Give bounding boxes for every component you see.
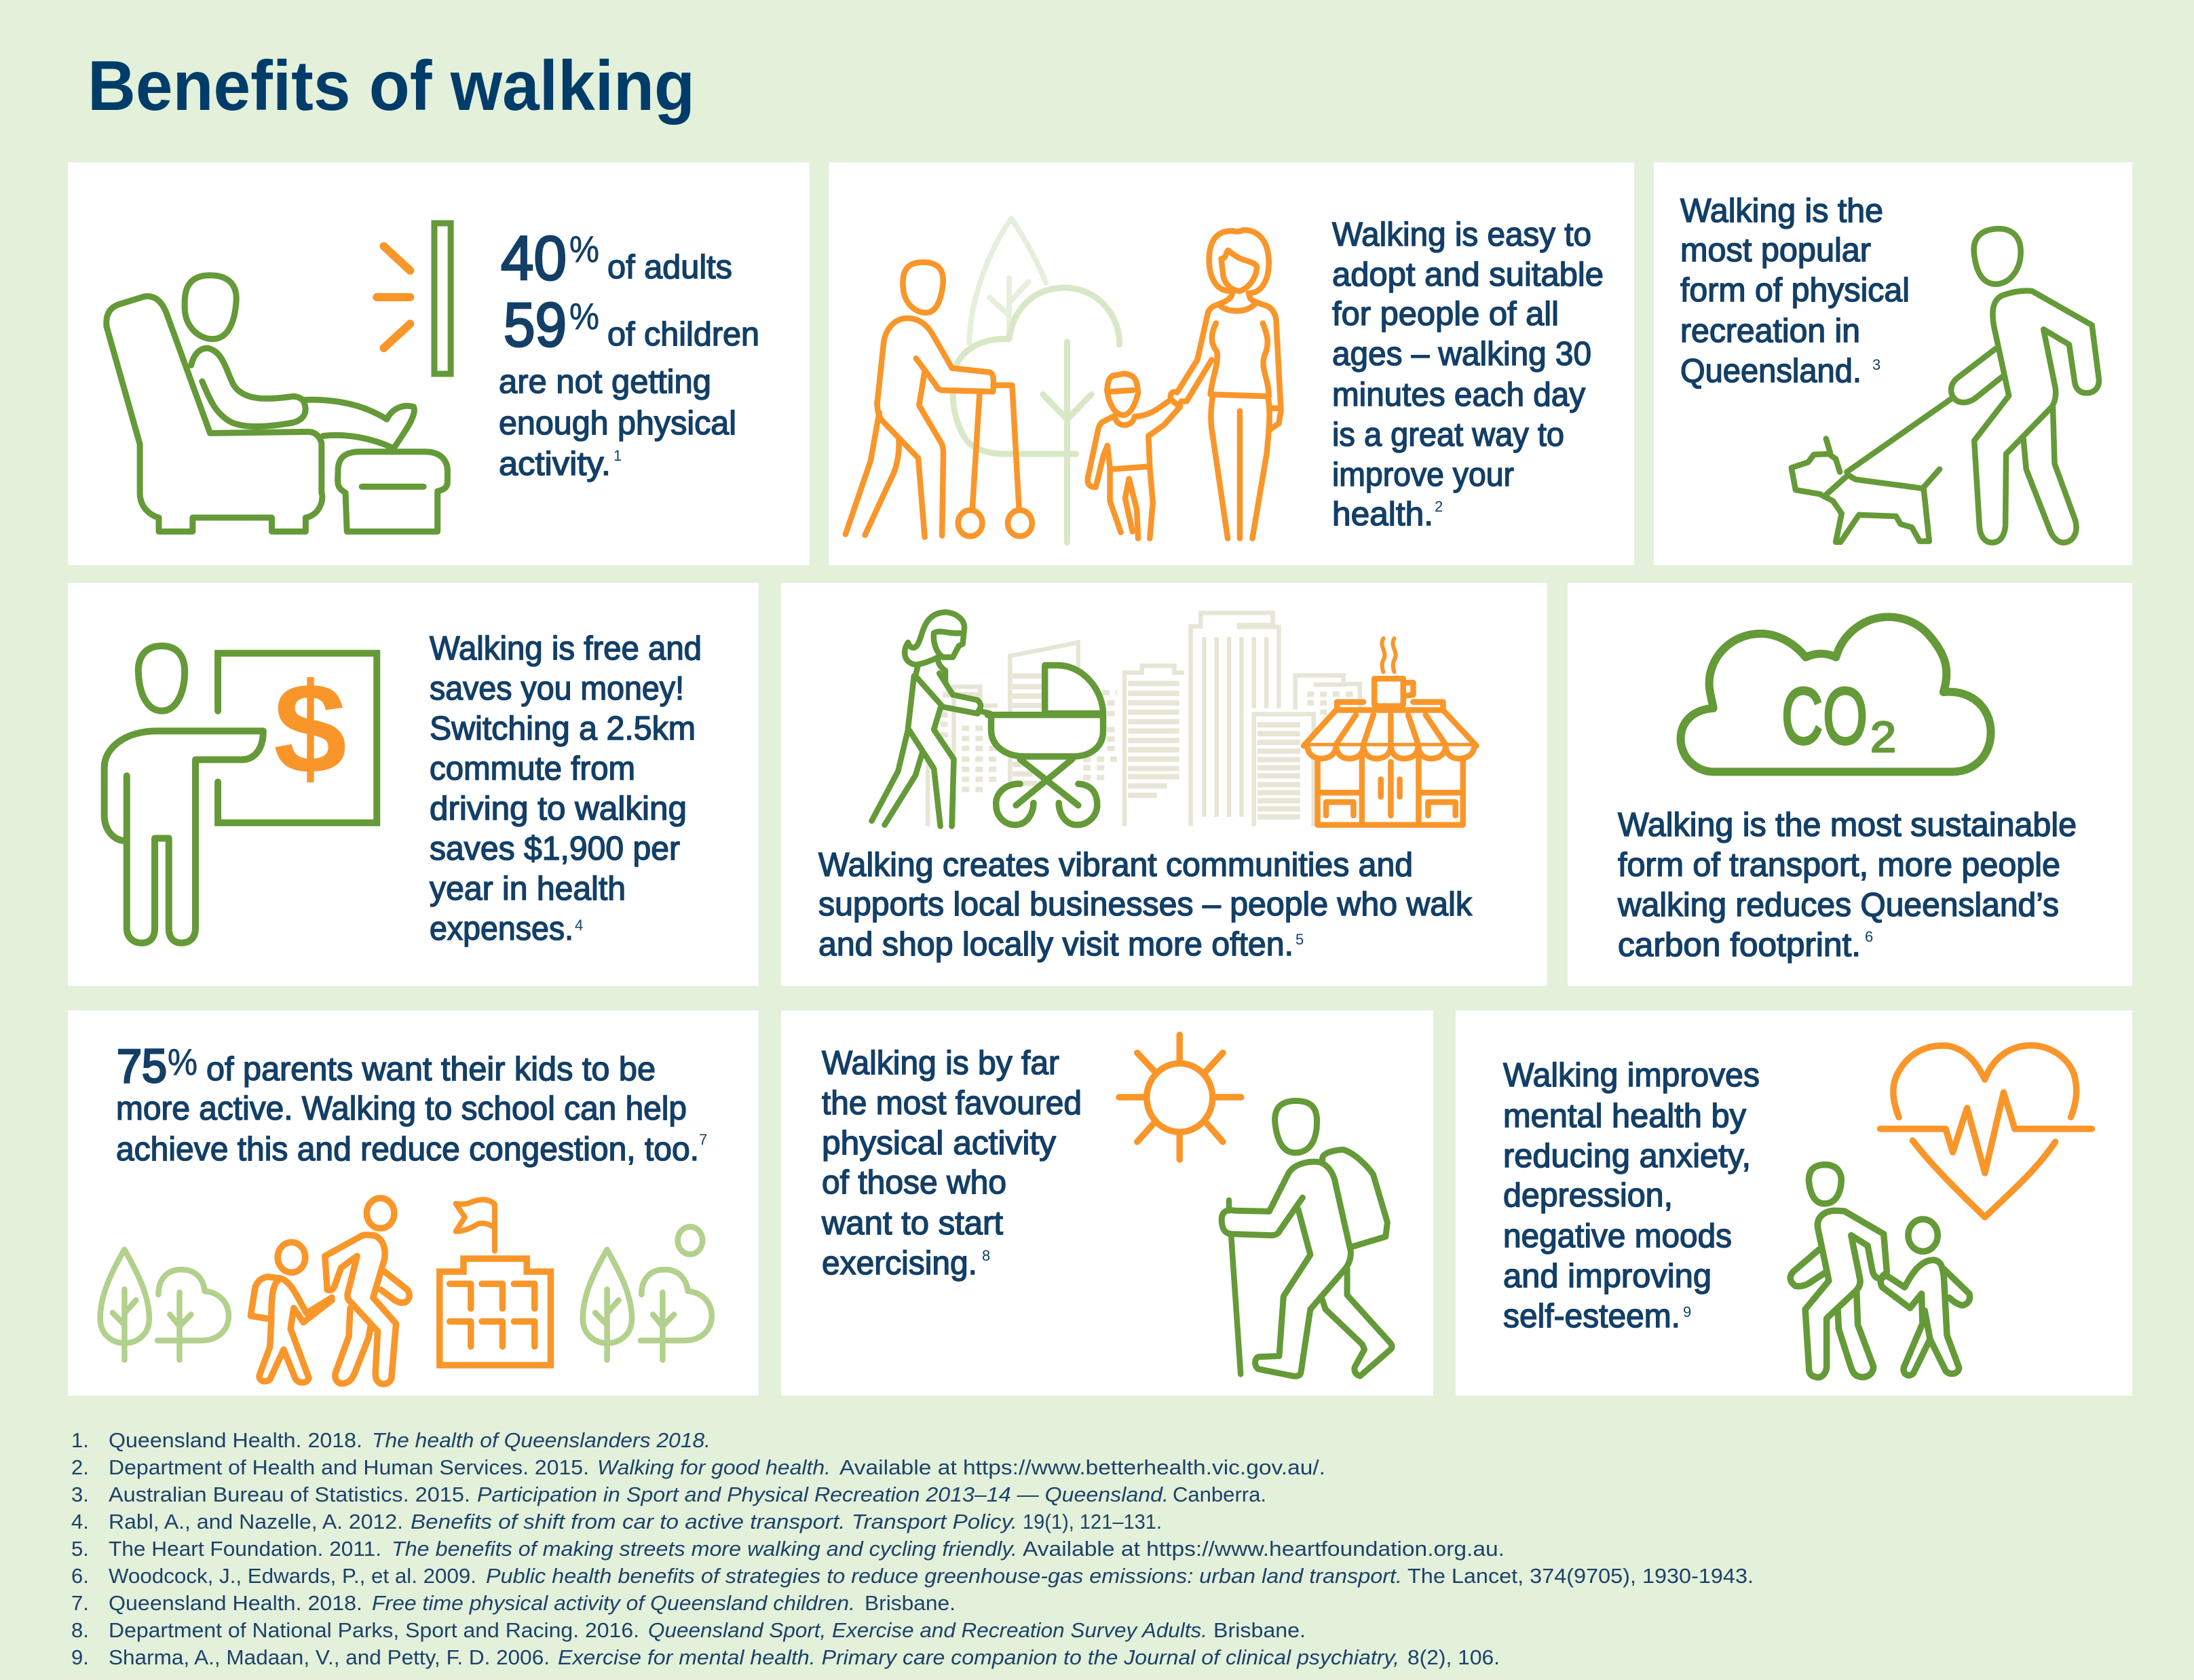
references list — [71, 1428, 1754, 1669]
text: easy to adopt: Walking is easy to — [1332, 216, 1591, 253]
text: saves money: 4 — [575, 917, 583, 934]
references list: 8(2), 106. — [1407, 1645, 1500, 1669]
statistic text: 1 — [613, 447, 622, 464]
text: mental health: self-esteem. — [1503, 1298, 1680, 1335]
references list: Available at https://www.heartfoundation.org.au. — [1023, 1537, 1505, 1561]
references list: The Heart Foundation. 2011. — [109, 1537, 381, 1561]
references list: 5. — [71, 1537, 89, 1561]
panel: vibrant communities — [781, 583, 1547, 986]
text: saves money: commute from — [430, 750, 635, 787]
references list: The benefits of making streets more walking and cycling friendly. — [392, 1537, 1017, 1561]
references list: Free time physical activity of Queensland children. — [372, 1591, 855, 1615]
statistic text: of children — [607, 316, 759, 353]
statistic text: 40 — [501, 224, 567, 293]
text: sustainable transport — [1617, 807, 2077, 963]
references list: Sharma, A., Madaan, V., and Petty, F. D. 2006. — [109, 1645, 550, 1669]
references list: Brisbane. — [1213, 1618, 1306, 1642]
references list: 7. — [71, 1591, 89, 1615]
statistic text: of adults — [607, 249, 732, 286]
text: walking to school: % — [168, 1041, 197, 1083]
references list: Exercise for mental health. Primary care companion to the Journal of clinical psychiatry, — [558, 1645, 1399, 1669]
text: walking to school — [116, 1039, 707, 1168]
icon: older man with walker, child and mother among trees — [846, 218, 1281, 543]
references list: Australian Bureau of Statistics. 2015. — [109, 1483, 470, 1506]
text: walking to school: achieve this and reduce congestion, too. — [116, 1131, 699, 1168]
text: mental health: reducing anxiety, — [1503, 1138, 1751, 1175]
statistic text: % — [569, 295, 599, 337]
icon: person pointing at a dollar board — [105, 646, 377, 943]
text: favoured activity — [821, 1045, 1082, 1282]
references list: Canberra. — [1173, 1483, 1266, 1506]
references list: Participation in Sport and Physical Recreation 2013–14 — Queensland. — [477, 1483, 1169, 1506]
references list: Walking for good health. — [597, 1455, 831, 1479]
panel: easy to adopt — [829, 162, 1634, 565]
statistic text — [499, 224, 759, 482]
text: saves money: Switching a 2.5km — [430, 710, 696, 747]
text: sustainable transport: form of transport, more people — [1618, 847, 2060, 883]
text: easy to adopt: improve your — [1332, 457, 1514, 493]
text: most popular recreation — [1680, 193, 1910, 389]
text: mental health: Walking improves — [1503, 1057, 1760, 1094]
text: walking to school: of parents want their kids to be — [206, 1051, 656, 1088]
text: sustainable transport: Walking is the most sustainable — [1618, 807, 2077, 843]
text: walking to school: more active. Walking to school can help — [116, 1090, 687, 1127]
text: mental health — [1503, 1057, 1760, 1335]
text: sustainable transport: carbon footprint. — [1618, 927, 1861, 963]
icon: sun and hiker with walking stick — [1119, 1035, 1392, 1376]
text: most popular recreation: 3 — [1872, 356, 1880, 373]
text: most popular recreation: most popular — [1680, 232, 1871, 269]
text: vibrant communities: 5 — [1295, 931, 1304, 948]
text: favoured activity: 8 — [982, 1247, 990, 1264]
panel: walking to school — [68, 1010, 759, 1396]
text: easy to adopt: minutes each day — [1332, 377, 1585, 413]
references list: 1. — [71, 1428, 89, 1452]
text: walking to school: 7 — [699, 1131, 707, 1148]
references list: Queensland Health. 2018. — [109, 1591, 362, 1615]
references list: Public health benefits of strategies to reduce greenhouse-gas emissions: urban land transport. — [486, 1564, 1402, 1588]
panel: favoured activity — [781, 1010, 1433, 1396]
text: easy to adopt — [1332, 216, 1604, 533]
text: mental health: negative moods — [1503, 1218, 1732, 1255]
text: favoured activity: exercising. — [822, 1245, 977, 1282]
statistic text: enough physical — [499, 405, 736, 442]
icon: person pointing at a dollar board: $ — [273, 657, 347, 801]
references list: Benefits of shift from car to active transport. Transport Policy. — [411, 1510, 1017, 1533]
panel: mental health — [1456, 1010, 2132, 1396]
text: sustainable transport: 6 — [1865, 928, 1873, 945]
panel: physical inactivity statistic — [68, 162, 810, 565]
references list: Woodcock, J., Edwards, P., et al. 2009. — [109, 1564, 476, 1588]
references list: Rabl, A., and Nazelle, A. 2012. — [109, 1510, 403, 1533]
panel: most popular recreation — [1654, 162, 2132, 565]
panel: saves money — [68, 583, 759, 986]
text: easy to adopt: health. — [1332, 496, 1433, 533]
text: mental health: 9 — [1683, 1303, 1691, 1320]
text: sustainable transport: walking reduces Queensland’s — [1617, 887, 2059, 923]
references list: 9. — [71, 1645, 89, 1669]
icon: CO2 cloud — [1681, 617, 1991, 771]
icon: person in armchair watching television — [107, 223, 451, 531]
references list: The Lancet, 374(9705), 1930-1943. — [1407, 1564, 1754, 1588]
text: saves money: Walking is free and — [430, 630, 702, 667]
text: saves money: saves $1,900 per — [430, 831, 680, 867]
text: vibrant communities — [818, 847, 1472, 963]
text: saves money: driving to walking — [430, 790, 687, 827]
statistic text: are not getting — [499, 364, 711, 400]
statistic text: % — [569, 228, 599, 270]
text: easy to adopt: ages – walking 30 — [1332, 336, 1591, 373]
statistic text: 59 — [504, 290, 567, 360]
text: most popular recreation: Queensland. — [1680, 353, 1861, 389]
text: saves money: expenses. — [430, 911, 573, 947]
references list: 19(1), 121–131. — [1023, 1510, 1162, 1533]
icon: CO2 cloud: CO — [1781, 672, 1868, 761]
text: easy to adopt: 2 — [1435, 498, 1443, 515]
references list: Department of Health and Human Services. 2015. — [109, 1455, 589, 1479]
icon: CO2 cloud: 2 — [1870, 712, 1896, 761]
icon: woman with pram, city skyline and cafe — [871, 612, 1477, 826]
text: vibrant communities: and shop locally visit more often. — [818, 926, 1293, 963]
text: favoured activity: Walking is by far — [822, 1045, 1059, 1082]
text: easy to adopt: adopt and suitable — [1332, 256, 1604, 293]
icon: person walking a dog on a leash — [1792, 229, 2099, 543]
references list: Department of National Parks, Sport and Racing. 2016. — [109, 1618, 639, 1642]
references list: 4. — [71, 1510, 89, 1533]
references list: Queensland Health. 2018. — [109, 1428, 362, 1452]
references list: The health of Queenslanders 2018. — [372, 1428, 711, 1452]
text: saves money — [430, 630, 702, 947]
text: favoured activity: physical activity — [822, 1125, 1056, 1162]
references list: Brisbane. — [865, 1591, 956, 1615]
text: walking to school: 75 — [117, 1039, 167, 1092]
panel: sustainable transport — [1568, 583, 2132, 986]
statistic text: activity. — [499, 446, 611, 482]
text: mental health: and improving — [1503, 1258, 1711, 1295]
icon: heart with pulse line above adult and child — [1790, 1046, 2092, 1377]
references list: 3. — [71, 1483, 89, 1506]
text: vibrant communities: supports local businesses – people who walk — [818, 886, 1472, 923]
text: saves money: year in health — [430, 871, 626, 907]
references list: 8. — [71, 1618, 89, 1642]
text: vibrant communities: Walking creates vibrant communities and — [818, 847, 1413, 883]
references list: Queensland Sport, Exercise and Recreation Survey Adults. — [648, 1618, 1207, 1642]
text: favoured activity: of those who — [822, 1164, 1006, 1201]
text: saves money: saves you money! — [430, 670, 684, 707]
text: mental health: mental health by — [1503, 1098, 1746, 1134]
text: favoured activity: want to start — [821, 1205, 1003, 1242]
text: mental health: depression, — [1503, 1177, 1673, 1214]
references list: 6. — [71, 1564, 89, 1588]
references list: 2. — [71, 1455, 89, 1479]
text: most popular recreation: form of physical — [1680, 272, 1910, 309]
icon: parent and child walking to school between trees — [100, 1198, 712, 1384]
text: easy to adopt: is a great way to — [1332, 417, 1564, 453]
text: easy to adopt: for people of all — [1332, 296, 1559, 332]
text: most popular recreation: Walking is the — [1680, 193, 1883, 229]
title: Benefits of walking — [88, 47, 695, 126]
text: favoured activity: the most favoured — [822, 1085, 1082, 1122]
text: most popular recreation: recreation in — [1680, 313, 1860, 349]
references list: Available at https://www.betterhealth.vic.gov.au/. — [839, 1455, 1325, 1479]
